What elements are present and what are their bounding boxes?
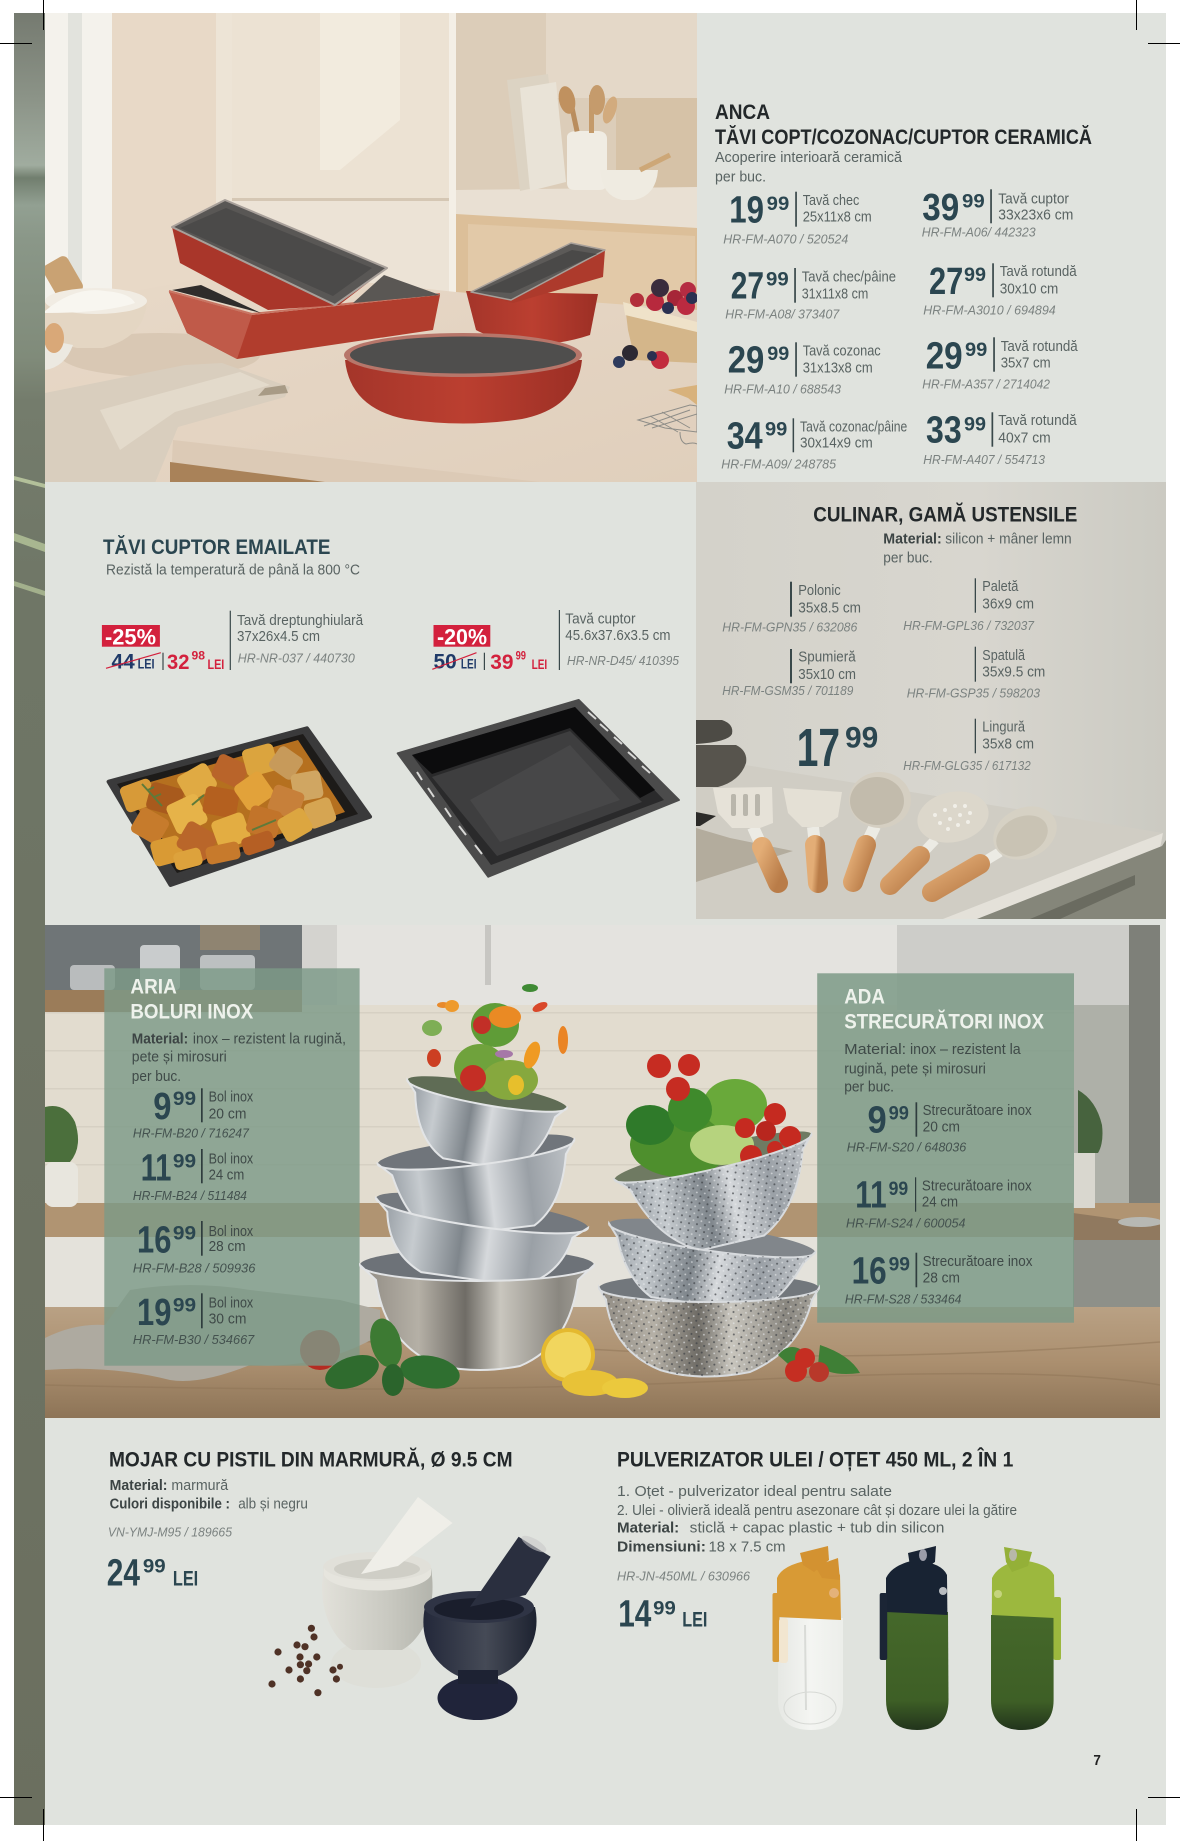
product: marble mortar text: LEI — [173, 1568, 198, 1591]
offer: tavă cuptor: 45.6x37.6x3.5 cm — [565, 628, 670, 644]
heading: ADA: STRECURĂTORI INOX — [844, 1010, 1044, 1033]
price: 17.99: 99 — [845, 721, 878, 754]
pan: round — [344, 333, 582, 424]
product: oil and vinegar sprayer text: 14 — [618, 1594, 651, 1636]
price item: Tavă cuptor: 99 — [962, 191, 985, 212]
price item: Bol 24 cm: 24 cm — [209, 1167, 244, 1183]
offer: tavă cuptor: Tavă cuptor — [565, 611, 636, 627]
price item: Bol 24 cm: 99 — [173, 1151, 196, 1172]
price item: Tavă cozonac/pâine: Tavă cozonac/pâine — [800, 420, 907, 436]
image: white marble mortar — [322, 1497, 452, 1688]
dark stoneware bowls — [696, 720, 746, 826]
utensil: skimmer — [890, 785, 993, 885]
strainer interiors — [599, 1123, 819, 1302]
counter — [810, 776, 1166, 919]
product: marble mortar text: marmură — [171, 1478, 229, 1494]
panel: ANCA pans text — [697, 13, 1166, 482]
price item: Tavă cozonac/pâine: HR-FM-A09/ 248785 — [721, 456, 837, 471]
price item: Tavă cuptor: 39 — [922, 187, 959, 229]
offer: tavă dreptunghiulară — [102, 611, 364, 674]
price item: Strecurătoare 20 cm: HR-FM-S20 / 648036 — [847, 1140, 967, 1155]
product: oil and vinegar sprayer text: 99 — [653, 1598, 676, 1619]
price item: Bol 30 cm — [133, 1292, 255, 1347]
item: Paletă: Paletă — [982, 579, 1019, 595]
tea towel — [45, 363, 290, 483]
heading: ARIA: ARIA — [130, 975, 177, 998]
item: Paletă: HR-FM-GPL36 / 732037 — [903, 618, 1035, 633]
price item: Strecurătoare 24 cm: 99 — [889, 1179, 908, 1200]
bowl 1 (top) front wall — [395, 1080, 567, 1178]
material note: pete și mirosuri — [132, 1050, 227, 1066]
decorative left strip — [14, 13, 45, 1825]
product: marble mortar text: MOJAR CU PISTIL DIN MARMURĂ, Ø 9.5 CM — [109, 1449, 512, 1472]
utensil: slotted turner — [713, 787, 778, 883]
price item: Bol 28 cm: 28 cm — [209, 1239, 246, 1255]
price item: Bol 24 cm: HR-FM-B24 / 511484 — [133, 1188, 247, 1203]
price item: Bol 28 cm — [133, 1219, 256, 1275]
image: stack of stainless bowls with flying salad — [360, 984, 594, 1370]
offer: tavă dreptunghiulară: LEI — [208, 656, 224, 672]
product: oil and vinegar sprayer text: Dimensiuni: — [617, 1540, 706, 1556]
material note — [132, 1031, 346, 1085]
material note: Material: — [844, 1042, 906, 1058]
offer: tavă cuptor: 99 — [516, 648, 526, 662]
panel: bottom products — [45, 1418, 1166, 1825]
price item: Bol 24 cm — [133, 1148, 254, 1203]
price item: Bol 20 cm: 99 — [173, 1089, 196, 1110]
price item: Strecurătoare 24 cm: HR-FM-S24 / 600054 — [846, 1216, 966, 1231]
item: Lingură — [903, 719, 1034, 773]
item: Lingură: HR-FM-GLG35 / 617132 — [903, 758, 1031, 773]
material note: Material: — [132, 1031, 188, 1047]
material note: Material: — [883, 531, 942, 547]
price item: Tavă rotundă 35x7: 29 — [926, 335, 963, 377]
strainer 2 front wall — [600, 1224, 815, 1319]
price item: Strecurătoare 28 cm: Strecurătoare inox — [923, 1254, 1033, 1270]
item: Spatulă: HR-FM-GSP35 / 598203 — [907, 686, 1041, 701]
bowl 4 (bottom) front wall — [360, 1265, 594, 1370]
price item: Strecurătoare 28 cm — [845, 1250, 1033, 1306]
product: oil and vinegar sprayer text — [617, 1448, 1017, 1636]
price item: Bol 20 cm — [133, 1086, 254, 1141]
heading: Culinar: CULINAR, GAMĂ USTENSILE — [813, 504, 1077, 527]
image: cherry tomatoes and leaves — [778, 1345, 860, 1382]
strip of panel colour beside kitchen photo — [45, 919, 1166, 1419]
flying salad — [422, 984, 568, 1100]
item: Polonic — [722, 582, 861, 635]
offer: tavă cuptor: -20% — [437, 624, 487, 650]
item: Paletă: 36x9 cm — [982, 596, 1034, 612]
product: oil and vinegar sprayer text: 1. Oțet - pulverizator ideal pentru salate — [617, 1484, 892, 1500]
bowl interiors seen from above — [360, 1069, 594, 1281]
price item: Tavă cuptor — [922, 187, 1073, 240]
price item: Strecurătoare 20 cm: Strecurătoare inox — [923, 1103, 1032, 1119]
description: per buc. — [715, 170, 766, 186]
price item: Strecurătoare 28 cm: 99 — [889, 1255, 910, 1276]
product: marble mortar text: VN-YMJ-M95 / 189665 — [108, 1525, 233, 1540]
price item: Bol 28 cm: Bol inox — [209, 1224, 254, 1240]
price item: Tavă rotundă 35x7 — [922, 335, 1079, 391]
offer: tavă cuptor — [432, 610, 680, 674]
item: Spumieră: HR-FM-GSM35 / 701189 — [722, 683, 853, 698]
pan: loaf on top — [172, 200, 387, 310]
description: Acoperire interioară ceramică — [715, 150, 903, 166]
image: tray with roast potatoes — [109, 728, 370, 885]
price item: Tavă cozonac/pâine — [721, 415, 907, 471]
product: oil and vinegar sprayer text: Material: — [617, 1521, 679, 1537]
price item: Tavă rotundă 40x7 — [923, 410, 1078, 467]
offer: tavă cuptor: HR-NR-D45/ 410395 — [567, 653, 680, 668]
item: Spumieră — [722, 649, 857, 698]
price item: Tavă rotundă 40x7: 99 — [964, 415, 986, 436]
utensil: ladle — [849, 772, 911, 882]
material note: silicon + mâner lemn — [945, 531, 1072, 547]
price item: Tavă rotundă 35x7: HR-FM-A357 / 2714042 — [922, 376, 1051, 391]
item: Spatulă: 35x9.5 cm — [982, 665, 1045, 681]
right plant and pot — [1073, 1090, 1102, 1208]
heading: ARIA — [130, 975, 253, 1023]
item: Lingură: Lingură — [982, 720, 1026, 736]
price item: Tavă cozonac: 99 — [767, 344, 789, 365]
price item: Tavă rotundă 35x7: 35x7 cm — [1001, 355, 1051, 371]
heading: Tăvi cuptor emailate: TĂVI CUPTOR EMAILATE — [103, 536, 330, 559]
price item: Strecurătoare 28 cm: HR-FM-S28 / 533464 — [845, 1291, 962, 1306]
item: Spatulă: Spatulă — [982, 648, 1026, 664]
price item: Tavă rotundă 40x7: HR-FM-A407 / 554713 — [923, 452, 1046, 467]
product: marble mortar text — [107, 1449, 513, 1595]
price item: Tavă cozonac: 31x13x8 cm — [803, 360, 873, 376]
price item: Tavă chec: 19 — [729, 190, 764, 232]
price item: Tavă rotundă 30x10: 99 — [964, 265, 986, 286]
price item: Bol 20 cm: 9 — [153, 1086, 171, 1128]
material note: inox – rezistent la — [910, 1042, 1022, 1058]
material note — [883, 531, 1072, 567]
mid counter and lower cabinets — [45, 1203, 1162, 1307]
offer: tavă dreptunghiulară: Tavă dreptunghiulară — [237, 613, 364, 629]
price item: Tavă chec: HR-FM-A070 / 520524 — [723, 231, 848, 246]
price item: Bol 24 cm: 11 — [141, 1148, 171, 1190]
image: green sprayer with lime cap — [991, 1547, 1061, 1730]
price item: Strecurătoare 20 cm: 99 — [889, 1103, 909, 1124]
price item: Tavă cozonac: 29 — [728, 339, 764, 381]
price item: Bol 30 cm: 30 cm — [209, 1311, 246, 1327]
towel — [45, 1285, 380, 1381]
flour bowl — [41, 254, 147, 370]
cooling rack — [638, 405, 697, 444]
product: marble mortar text: alb și negru — [238, 1496, 308, 1512]
offer: tavă dreptunghiulară: 44 — [112, 650, 135, 673]
panel: kitchen photo with bowls and strainers — [45, 925, 1162, 1418]
item: Polonic: 35x8.5 cm — [798, 600, 861, 616]
product: oil and vinegar sprayer text: 18 x 7.5 cm — [708, 1540, 786, 1556]
price item: Strecurătoare 28 cm: 16 — [852, 1250, 887, 1292]
offer: tavă dreptunghiulară: HR-NR-037 / 440730 — [238, 651, 356, 666]
product: marble mortar text: 99 — [143, 1556, 166, 1577]
price item: Tavă cozonac/pâine: 30x14x9 cm — [800, 435, 873, 451]
offer: tavă dreptunghiulară: -25% — [105, 624, 156, 650]
pan: large rectangular — [169, 275, 440, 359]
price item: Strecurătoare 24 cm: 11 — [855, 1174, 887, 1216]
product: oil and vinegar sprayer text: 2. Ulei - olivieră ideală pentru asezonare cât și dozare ulei la gătire — [617, 1503, 1017, 1519]
heading: ADA — [844, 985, 1044, 1033]
material note — [844, 1042, 1022, 1096]
item: Paletă — [903, 578, 1035, 633]
pan: small round-rect — [466, 291, 598, 345]
item: Polonic: Polonic — [798, 583, 841, 599]
product: marble mortar text: Material: — [110, 1478, 168, 1494]
price item: Tavă rotundă 30x10: HR-FM-A3010 / 694894 — [923, 302, 1056, 317]
price item: Tavă cozonac — [724, 339, 881, 396]
panel: Culinar text — [722, 504, 1077, 778]
price item: Tavă rotundă 30x10 — [923, 261, 1078, 317]
price item: Tavă chec: 25x11x8 cm — [803, 210, 872, 226]
image: clear sprayer with orange cap — [772, 1546, 843, 1730]
panel: ANCA photo of red ceramic pans — [41, 13, 698, 500]
offer: tavă dreptunghiulară: 37x26x4.5 cm — [237, 629, 320, 645]
image: peppercorns — [268, 1625, 343, 1696]
upper cabinets — [45, 925, 1160, 1012]
item: Lingură: 35x8 cm — [982, 737, 1034, 753]
price item: Tavă chec: 99 — [767, 194, 789, 215]
price item: Tavă chec — [723, 190, 872, 246]
price item: Tavă rotundă 40x7: 40x7 cm — [998, 430, 1051, 446]
material note: inox – rezistent la rugină, — [193, 1031, 346, 1047]
price item: Tavă chec/pâine: 27 — [731, 265, 764, 307]
offer: tavă cuptor: LEI — [461, 655, 476, 671]
utensil: spoon — [932, 796, 1065, 892]
offer: tavă dreptunghiulară: LEI — [138, 655, 154, 671]
price item: Bol 30 cm: Bol inox — [209, 1296, 254, 1312]
price item: Bol 20 cm: 20 cm — [209, 1106, 246, 1122]
product: oil and vinegar sprayer text: LEI — [682, 1609, 707, 1632]
price item: Tavă cozonac/pâine: 99 — [765, 420, 787, 441]
image: empty enamel tray — [398, 700, 679, 877]
offer: tavă cuptor: 39 — [490, 651, 514, 674]
offer: tavă dreptunghiulară: 98 — [192, 648, 205, 662]
lettuce, tomatoes and water — [626, 1054, 801, 1177]
heading: ADA: ADA — [844, 985, 885, 1008]
strainer 3 (bottom) front wall — [599, 1288, 819, 1377]
price item: Tavă rotundă 30x10: 27 — [929, 261, 963, 303]
tomato under panel — [300, 1330, 340, 1370]
image: lemon slices — [541, 1328, 648, 1398]
image: black marble mortar — [423, 1533, 551, 1720]
marble counter — [45, 282, 696, 482]
description — [715, 150, 903, 186]
material note: per buc. — [844, 1080, 894, 1096]
price item: Tavă chec: Tavă chec — [803, 193, 859, 209]
berries basket — [613, 279, 698, 369]
utensil: flat spatula — [783, 788, 842, 883]
price item: Tavă rotundă 35x7: Tavă rotundă — [1001, 339, 1079, 355]
price item: Tavă rotundă 30x10: Tavă rotundă — [1000, 264, 1078, 280]
image: green sprayer with navy cap — [880, 1546, 948, 1730]
panel: Culinar utensils photo — [696, 482, 1166, 919]
price item: Bol 28 cm: 99 — [173, 1223, 196, 1244]
price item: Tavă chec/pâine: HR-FM-A08/ 373407 — [725, 306, 840, 321]
price item: Tavă cozonac: Tavă cozonac — [803, 344, 881, 360]
price item: Bol 30 cm: HR-FM-B30 / 534667 — [133, 1332, 255, 1347]
folded cloth — [696, 828, 793, 882]
subheading: Rezistă la temperatură de până la 800 °C — [106, 562, 360, 578]
books, jar, spoons and bowl on shelf — [507, 74, 670, 200]
offer: tavă dreptunghiulară: 32 — [167, 651, 189, 674]
price item: Tavă rotundă 40x7: 33 — [926, 410, 962, 452]
product: oil and vinegar sprayer text: HR-JN-450ML / 630966 — [617, 1569, 751, 1584]
price item: Strecurătoare 24 cm: 24 cm — [922, 1195, 958, 1211]
item: Spumieră: 35x10 cm — [798, 667, 856, 683]
heading: ANCA: ANCA — [715, 101, 770, 124]
price item: Strecurătoare 24 cm: Strecurătoare inox — [922, 1179, 1032, 1195]
price item: Tavă cuptor: 33x23x6 cm — [998, 207, 1073, 223]
product: marble mortar text: 24 — [107, 1553, 140, 1595]
price item: Tavă rotundă 30x10: 30x10 cm — [1000, 281, 1058, 297]
price item: Tavă rotundă 35x7: 99 — [965, 340, 987, 361]
price item: Strecurătoare 28 cm: 28 cm — [923, 1271, 960, 1287]
price item: Bol 30 cm: 99 — [173, 1296, 196, 1317]
price item: Tavă cuptor: Tavă cuptor — [998, 191, 1069, 207]
offer: tavă cuptor: 50 — [434, 650, 457, 673]
heading: ARIA: BOLURI INOX — [130, 1000, 253, 1023]
image: stack of perforated strainers with lettuce and tomatoes — [599, 1054, 831, 1377]
left plant and pot — [45, 1106, 78, 1207]
price item: Tavă cozonac/pâine: 34 — [727, 415, 763, 457]
wooden worktop — [45, 1307, 1160, 1418]
product: oil and vinegar sprayer text: PULVERIZATOR ULEI / OȚET 450 ML, 2 ÎN 1 — [617, 1448, 1014, 1472]
product: marble mortar text: Culori disponibile : — [110, 1496, 230, 1512]
page number: 7 — [1093, 1752, 1101, 1769]
offer: tavă cuptor: LEI — [532, 656, 547, 672]
price item: Strecurătoare 20 cm: 20 cm — [923, 1120, 960, 1136]
price item: Tavă chec/pâine: Tavă chec/pâine — [802, 270, 896, 286]
heading: ANCA: TĂVI COPT/COZONAC/CUPTOR CERAMICĂ — [715, 126, 1092, 149]
bowl 3 front wall — [367, 1198, 588, 1294]
bowl 2 front wall — [378, 1140, 584, 1243]
price item: Bol 20 cm: HR-FM-B20 / 716247 — [133, 1126, 250, 1141]
price item: Bol 28 cm: HR-FM-B28 / 509936 — [133, 1260, 256, 1275]
price item: Bol 30 cm: 19 — [137, 1292, 171, 1334]
price item: Tavă cuptor: HR-FM-A06/ 442323 — [922, 225, 1036, 240]
image: basil leaves — [321, 1315, 462, 1396]
pan: small loaf — [471, 243, 605, 303]
price item: Strecurătoare 20 cm — [847, 1099, 1032, 1155]
price item: Tavă chec/pâine — [725, 265, 896, 321]
price item: Tavă chec/pâine: 99 — [766, 270, 789, 291]
shelf and wooden drawer — [456, 187, 697, 310]
material note: rugină, pete și mirosuri — [844, 1061, 986, 1077]
panel: ARIA stainless bowls — [104, 968, 360, 1366]
right dark wall — [1074, 925, 1160, 1210]
price item: Tavă rotundă 40x7: Tavă rotundă — [998, 413, 1078, 429]
heading: ANCA — [715, 101, 1092, 149]
material note: per buc. — [883, 551, 933, 567]
price item: Strecurătoare 24 cm — [846, 1174, 1032, 1231]
price item: Tavă chec/pâine: 31x11x8 cm — [802, 286, 868, 302]
item: Spatulă — [907, 647, 1045, 701]
price item: Strecurătoare 20 cm: 9 — [868, 1099, 887, 1141]
strainer 1 (top) front wall — [615, 1134, 831, 1265]
price item: Bol 24 cm: Bol inox — [209, 1151, 254, 1167]
product: oil and vinegar sprayer text: sticlă + capac plastic + tub din silicon — [690, 1521, 944, 1537]
price item: Bol 28 cm: 16 — [137, 1219, 171, 1261]
price item: Bol 20 cm: Bol inox — [209, 1090, 254, 1106]
panel: enamelled oven trays — [45, 482, 697, 925]
material note: per buc. — [132, 1069, 181, 1085]
item: Polonic: HR-FM-GPN35 / 632086 — [722, 620, 858, 635]
price item: Tavă cozonac: HR-FM-A10 / 688543 — [724, 381, 842, 396]
item: Spumieră: Spumieră — [798, 650, 857, 666]
panel: ADA stainless strainers — [817, 973, 1074, 1323]
tiled wall — [45, 1012, 817, 1166]
price: 17.99: 17 — [797, 718, 840, 778]
